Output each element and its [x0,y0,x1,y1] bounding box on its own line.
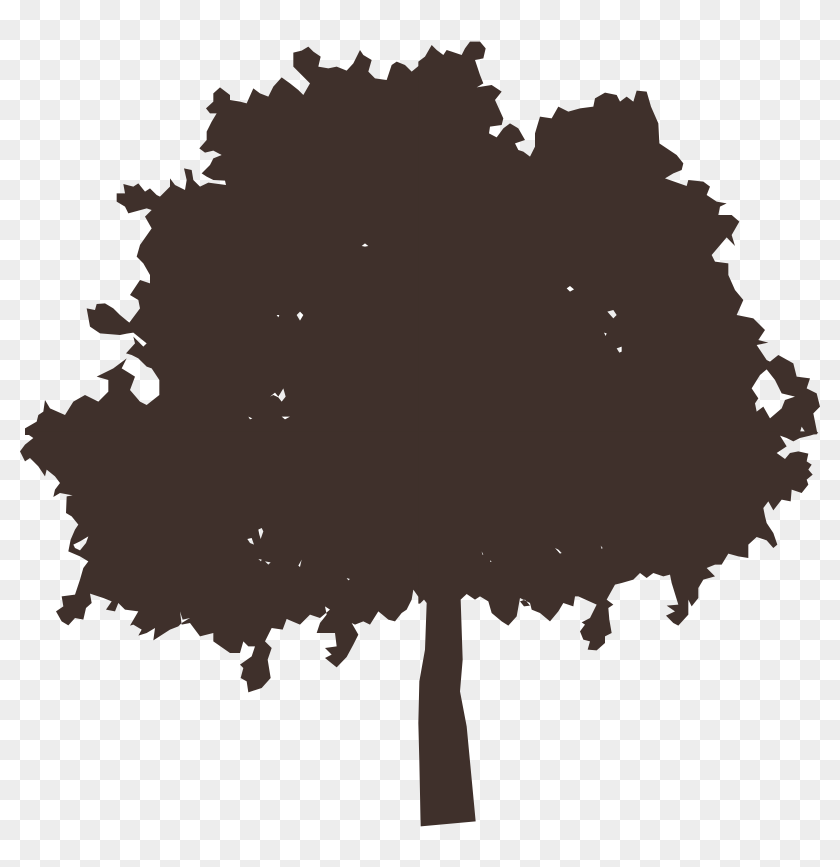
canopy: upper right [418,42,820,435]
canopy: lower left [20,431,422,692]
canopy and trunk: lower right [418,431,818,826]
canopy: upper left [25,47,422,435]
